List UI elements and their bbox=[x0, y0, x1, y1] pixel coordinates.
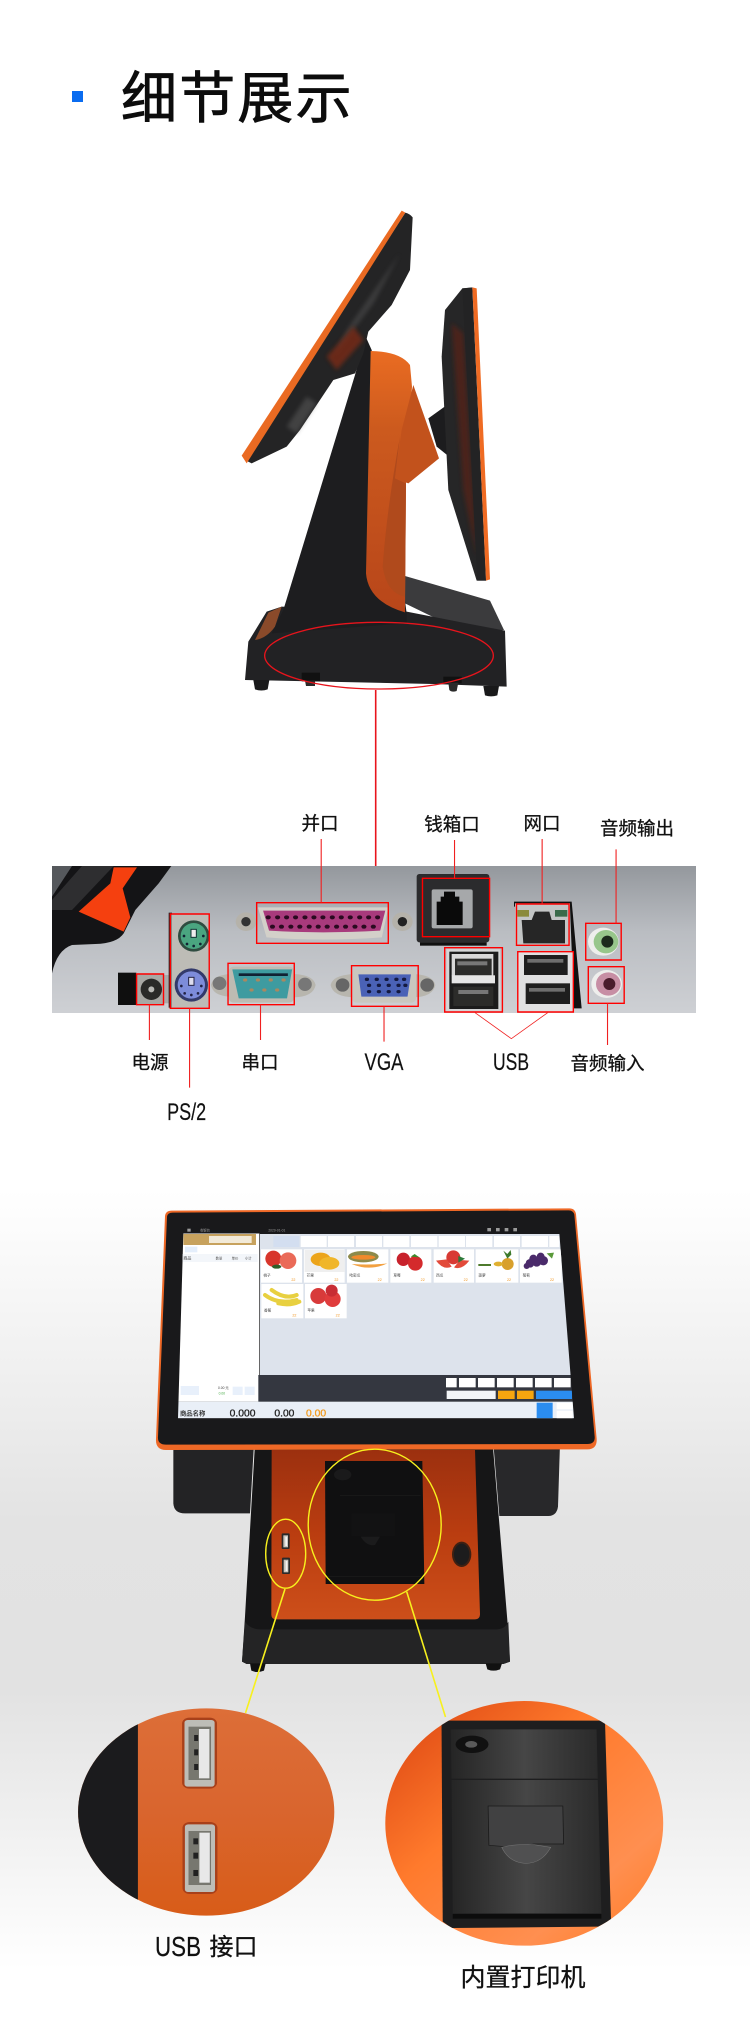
product names and prices bbox=[263, 1273, 554, 1318]
cash drawer RJ11 port bbox=[417, 874, 489, 946]
hole on orange panel bbox=[452, 1542, 471, 1567]
feet bbox=[250, 1663, 502, 1672]
fruit: watermelon bbox=[436, 1250, 469, 1268]
parallel port bbox=[236, 907, 413, 939]
label: 音频输入: 音频输入 bbox=[570, 1053, 645, 1074]
left order panel: 商品 bbox=[183, 1255, 191, 1261]
caption: USB 接口 bbox=[155, 1931, 258, 1962]
product names and prices: 香蕉 bbox=[264, 1308, 272, 1313]
product names and prices: 菠萝 bbox=[478, 1273, 486, 1278]
USB port top bbox=[182, 1718, 217, 1789]
printer upper lid bbox=[451, 1729, 598, 1779]
product names and prices: 22 bbox=[292, 1314, 296, 1318]
yellow highlight: printer ellipse bbox=[308, 1449, 441, 1600]
fruit: strawberries bbox=[397, 1253, 423, 1271]
bracket for customer display bbox=[428, 404, 453, 460]
orange rear body bbox=[366, 351, 412, 612]
product names and prices: 22 bbox=[336, 1314, 340, 1318]
red ellipse highlight bbox=[265, 622, 493, 689]
status values: 0.00 bbox=[306, 1408, 326, 1419]
orange arm bbox=[395, 385, 439, 483]
orange surface bbox=[381, 1700, 666, 1947]
detail circle: USB ports bbox=[76, 1707, 337, 1917]
red connector line bbox=[375, 690, 377, 866]
product names and prices: 22 bbox=[464, 1278, 468, 1282]
USB ports, left stack bbox=[447, 949, 500, 1011]
panel: rear I/O ports photo bbox=[52, 839, 696, 1088]
USB port bottom bbox=[182, 1822, 217, 1894]
product names and prices: 西瓜 bbox=[436, 1273, 444, 1278]
screen status row: 2020-01-01 bbox=[268, 1228, 286, 1232]
centre ports: parallel, serial, VGA bbox=[211, 907, 435, 1003]
action buttons bbox=[446, 1378, 572, 1399]
label: 串口: 串口 bbox=[241, 1052, 279, 1073]
orange surface bbox=[76, 1707, 337, 1917]
VGA port bbox=[331, 969, 435, 1003]
black pillar bbox=[272, 337, 407, 633]
label: 音频输出: 音频输出 bbox=[600, 818, 674, 839]
status values: 0.00 bbox=[274, 1408, 295, 1419]
fruit: peaches bbox=[265, 1251, 296, 1269]
product area bbox=[260, 1234, 573, 1375]
background bbox=[0, 1190, 750, 2037]
label: 电源: 电源 bbox=[131, 1052, 169, 1073]
detail circle: built-in printer bbox=[381, 1700, 666, 1947]
left ports: power and PS/2 bbox=[118, 913, 209, 1008]
stand corner, black and orange bbox=[52, 866, 171, 973]
right ports: RJ11, RJ45, USB, audio bbox=[417, 874, 622, 1012]
side view of POS terminal bbox=[242, 211, 507, 696]
category tabs bbox=[273, 1236, 559, 1247]
product names and prices: 桃子 bbox=[263, 1273, 271, 1278]
label: 并口: 并口 bbox=[301, 813, 339, 834]
black edge bbox=[78, 1724, 138, 1900]
door thumb notch bbox=[502, 1845, 551, 1863]
yellow connector to USB detail bbox=[246, 1589, 285, 1713]
screen status row: 收银台 bbox=[200, 1227, 211, 1232]
orange panel bbox=[271, 1450, 480, 1619]
icon: blue square bullet bbox=[72, 91, 83, 102]
caption: USB 接口: 接口 bbox=[210, 1934, 258, 1961]
label: 网口: 网口 bbox=[523, 813, 561, 834]
label: PS/2: PS/2 bbox=[167, 1099, 206, 1126]
fruit: bananas bbox=[265, 1290, 299, 1304]
left order panel: 单价 bbox=[232, 1256, 239, 1261]
product names and prices: 22 bbox=[550, 1278, 554, 1282]
network RJ45 port bbox=[514, 902, 582, 1008]
bottom status bar bbox=[177, 1402, 575, 1418]
power jack bbox=[118, 973, 171, 1005]
panel background bbox=[52, 866, 696, 1013]
paper slot bbox=[453, 1914, 601, 1919]
label: USB: USB bbox=[493, 1049, 529, 1076]
product names and prices: 22 bbox=[378, 1278, 382, 1282]
orange body inner shading bbox=[383, 437, 406, 597]
product names and prices: 22 bbox=[421, 1278, 425, 1282]
product names and prices: 葡萄 bbox=[523, 1273, 530, 1278]
fruit: mango bbox=[305, 1250, 345, 1272]
product names and prices: 苹果 bbox=[307, 1308, 315, 1313]
red highlight boxes bbox=[137, 878, 624, 1012]
screen bbox=[177, 1233, 575, 1419]
fruit: grapes bbox=[524, 1253, 554, 1269]
audio out port bbox=[588, 928, 619, 956]
central column bbox=[242, 1443, 510, 1664]
built-in printer cover bbox=[325, 1461, 424, 1584]
yellow highlight: USB ports ellipse bbox=[266, 1519, 306, 1588]
product cards bbox=[261, 1249, 562, 1318]
serial port bbox=[211, 967, 316, 1003]
fruit: pineapple bbox=[478, 1250, 514, 1270]
screen status row bbox=[187, 1227, 517, 1232]
status values: 商品名称 bbox=[180, 1409, 206, 1418]
fruit: apples bbox=[310, 1285, 341, 1307]
front view: stand and printer bbox=[173, 1443, 560, 1672]
product names and prices: 草莓 bbox=[393, 1273, 401, 1278]
orange frame bbox=[156, 1208, 597, 1450]
main display, rear bbox=[242, 211, 413, 463]
left order panel: 0.00 元 bbox=[218, 1386, 229, 1390]
audio in port bbox=[591, 970, 622, 998]
product names and prices: 哈密瓜 bbox=[349, 1273, 361, 1278]
printer lower lid bbox=[452, 1780, 601, 1913]
base bbox=[245, 576, 507, 696]
paper door bbox=[488, 1806, 564, 1847]
feed button bbox=[456, 1736, 489, 1753]
yellow connector to printer detail bbox=[407, 1592, 446, 1717]
rear wings bbox=[173, 1443, 560, 1516]
status values bbox=[180, 1409, 326, 1417]
caption: USB 接口: USB bbox=[155, 1931, 201, 1962]
label: 钱箱口: 钱箱口 bbox=[424, 814, 480, 835]
product names and prices: 芒果 bbox=[307, 1273, 314, 1278]
blue and white side keys bbox=[537, 1403, 573, 1418]
product names and prices: 22 bbox=[334, 1278, 338, 1282]
leader lines bbox=[149, 839, 616, 1088]
left order panel: 数量 bbox=[216, 1256, 223, 1261]
black bezel bbox=[158, 1210, 595, 1445]
left order panel bbox=[177, 1233, 259, 1402]
heading text: 细节展示 bbox=[121, 67, 354, 130]
left order panel: 小计 bbox=[245, 1256, 252, 1261]
printer body bbox=[442, 1721, 611, 1928]
base front bbox=[242, 1622, 510, 1664]
title bbox=[72, 67, 354, 130]
small USB ports bbox=[282, 1533, 290, 1574]
label: VGA: VGA bbox=[364, 1049, 404, 1076]
caption: 内置打印机: 内置打印机 bbox=[460, 1964, 586, 1992]
front view: display bbox=[156, 1208, 597, 1450]
product names and prices: 22 bbox=[291, 1278, 295, 1282]
fruit: melon bbox=[348, 1251, 387, 1268]
left order panel: 0.00 bbox=[219, 1391, 225, 1395]
status values: 0.000 bbox=[230, 1408, 256, 1419]
PS/2 ports bbox=[169, 913, 209, 1008]
product names and prices: 22 bbox=[507, 1278, 511, 1282]
customer display, rear bbox=[442, 287, 490, 581]
dark action bar bbox=[258, 1375, 575, 1402]
USB ports, right stack bbox=[518, 952, 573, 1012]
